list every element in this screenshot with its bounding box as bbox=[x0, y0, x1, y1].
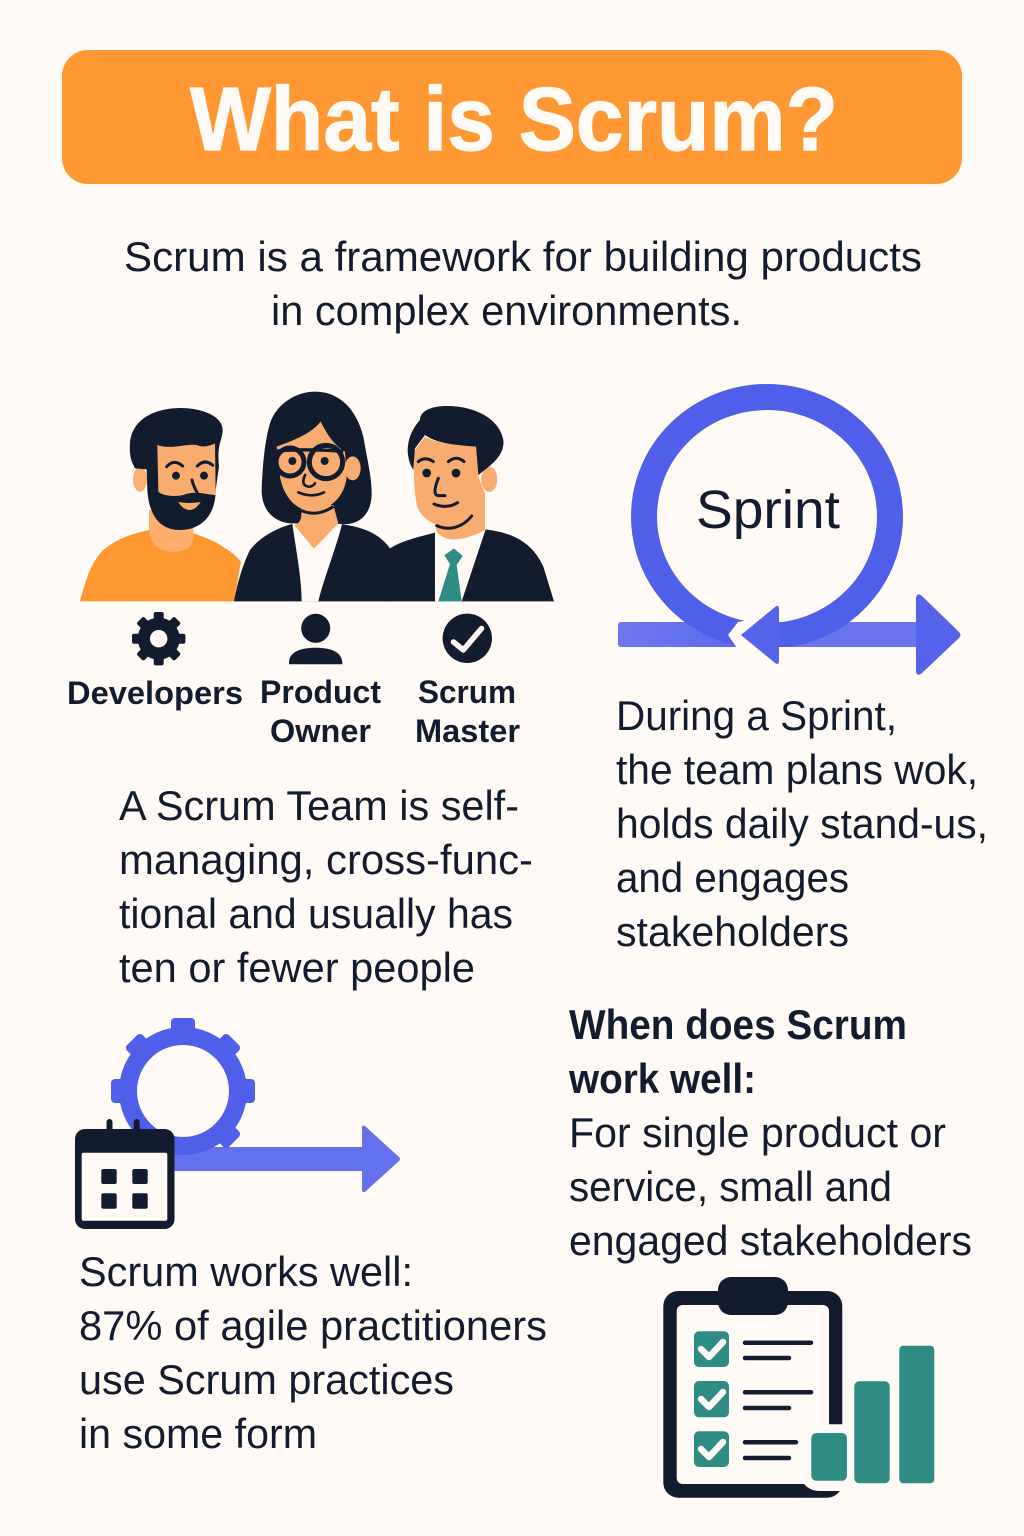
text: scrum team description: ten or fewer people bbox=[119, 944, 475, 991]
sprint left bar bbox=[618, 622, 738, 647]
text: scrum works well: use Scrum practices bbox=[79, 1356, 454, 1403]
text: when does scrum work well: work well: bbox=[568, 1055, 756, 1102]
icon: scrum master check bbox=[443, 614, 492, 663]
intro text: in complex environments. bbox=[271, 287, 742, 334]
person: developer bbox=[80, 408, 241, 601]
text: scrum works well: Scrum works well: bbox=[79, 1248, 413, 1295]
role labels: Product bbox=[260, 674, 381, 710]
role labels: Owner bbox=[270, 713, 371, 749]
role labels: Developers bbox=[67, 675, 243, 711]
title banner: What is Scrum? bbox=[190, 70, 838, 170]
sprint label: Sprint bbox=[696, 480, 840, 540]
text: when does scrum work well: service, small and bbox=[569, 1163, 892, 1210]
text: when does scrum work well: For single product or bbox=[569, 1109, 946, 1156]
text: during a sprint: holds daily stand-us, bbox=[616, 800, 988, 847]
intro text: Scrum is a framework for building products bbox=[124, 233, 922, 280]
text: during a sprint: the team plans wok, bbox=[616, 746, 978, 793]
gear cycle with arrow bbox=[75, 1018, 400, 1229]
text: scrum works well: in some form bbox=[79, 1410, 317, 1457]
text: during a sprint: stakeholders bbox=[616, 908, 849, 955]
title banner bbox=[62, 50, 962, 184]
text: scrum team description: tional and usually has bbox=[119, 890, 513, 937]
text: during a sprint bbox=[616, 692, 988, 955]
checklist rows bbox=[694, 1331, 811, 1467]
text: when does scrum work well: engaged stakeholders bbox=[569, 1217, 972, 1264]
right arrowhead bbox=[916, 594, 960, 675]
text: during a sprint: and engages bbox=[616, 854, 849, 901]
person: product owner bbox=[234, 392, 392, 601]
intro text bbox=[124, 233, 922, 334]
gap beside left arrowhead bbox=[728, 605, 778, 665]
text: when does scrum work well bbox=[568, 1001, 972, 1264]
text: scrum team description: A Scrum Team is self- bbox=[119, 782, 519, 829]
left arrowhead bbox=[741, 606, 779, 664]
icon: developers gear bbox=[132, 612, 185, 665]
icon: product owner person bbox=[289, 614, 342, 664]
text: scrum team description: managing, cross-func- bbox=[119, 836, 533, 883]
text: scrum works well: 87% of agile practitioners bbox=[79, 1302, 547, 1349]
text: scrum works well bbox=[79, 1248, 547, 1457]
text: when does scrum work well: When does Scrum bbox=[569, 1001, 907, 1048]
arrow bbox=[170, 1126, 400, 1192]
text: during a sprint: During a Sprint, bbox=[616, 692, 897, 739]
gear bbox=[111, 1018, 255, 1155]
role labels: Master bbox=[415, 713, 520, 749]
text: scrum team description bbox=[119, 782, 533, 991]
role labels bbox=[67, 674, 520, 749]
illustration: scrum team people bbox=[80, 392, 554, 601]
bar chart bbox=[811, 1346, 934, 1483]
clipboard board bbox=[663, 1277, 850, 1498]
sprint arrow shaft bbox=[770, 622, 920, 647]
sprint ring bbox=[644, 397, 890, 636]
role labels: Scrum bbox=[418, 674, 516, 710]
icon: clipboard checklist with bars bbox=[663, 1277, 934, 1498]
sprint cycle diagram bbox=[618, 397, 960, 675]
person: scrum master bbox=[390, 406, 554, 601]
calendar bbox=[75, 1119, 174, 1229]
